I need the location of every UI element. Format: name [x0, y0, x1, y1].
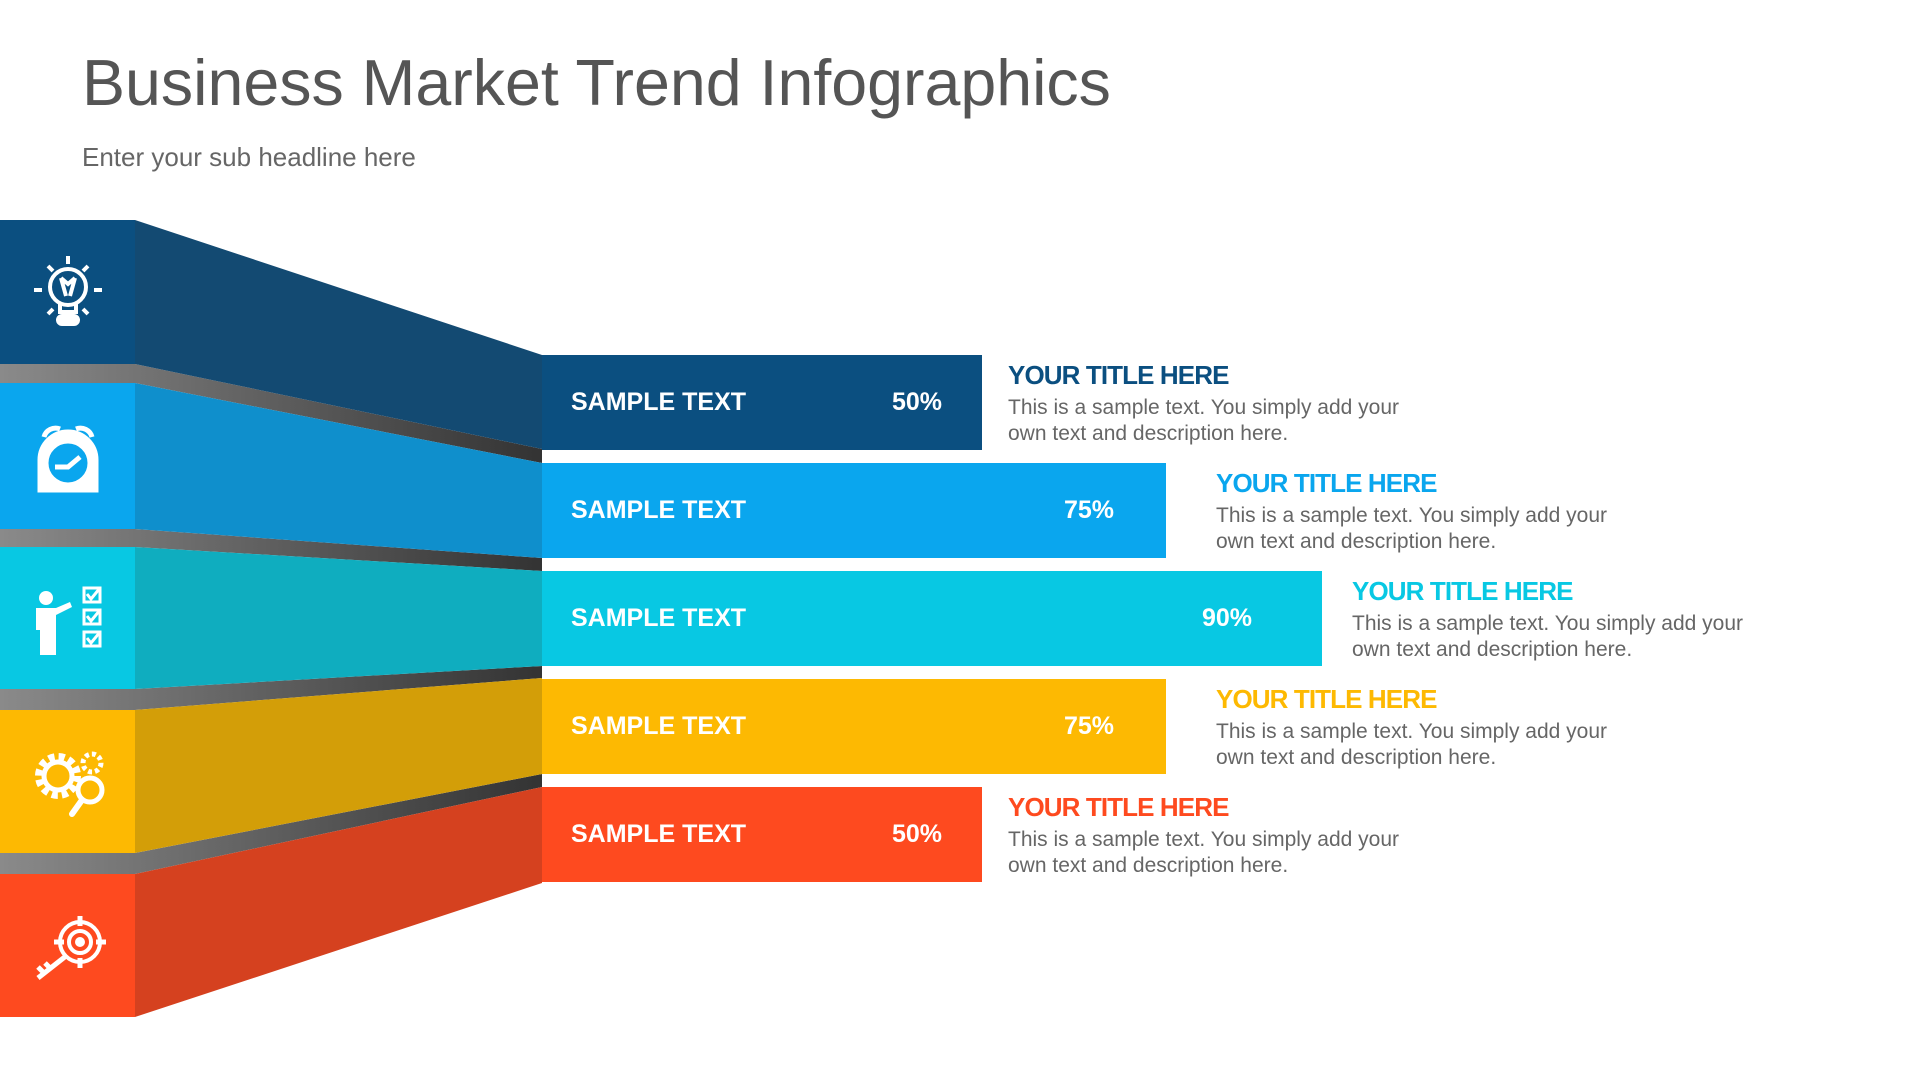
bar 2: SAMPLE TEXT [571, 496, 746, 524]
text block 3 [1352, 576, 1743, 661]
text block 5: This is a sample text. You simply add your [1008, 828, 1399, 851]
text block 3: This is a sample text. You simply add your [1352, 612, 1743, 635]
text block 3: YOUR TITLE HERE [1352, 576, 1573, 606]
subtitle: Enter your sub headline here [82, 142, 416, 172]
bar 3 [542, 571, 1322, 666]
bar 4: SAMPLE TEXT [571, 712, 746, 740]
bar 5: SAMPLE TEXT [571, 820, 746, 848]
title: Business Market Trend Infographics [82, 47, 1111, 119]
bar 2 [542, 463, 1166, 558]
text block 4 [1216, 684, 1607, 769]
panel 5 [0, 787, 542, 1017]
text block 5: YOUR TITLE HERE [1008, 792, 1229, 822]
text block 1: This is a sample text. You simply add your [1008, 396, 1399, 419]
icon: gears [39, 754, 102, 814]
text block 3: own text and description here. [1352, 638, 1632, 661]
bar 1 [542, 355, 982, 450]
bar 3: 90% [1202, 604, 1252, 632]
text block 4: own text and description here. [1216, 746, 1496, 769]
text block 1: YOUR TITLE HERE [1008, 360, 1229, 390]
bar 5: 50% [892, 820, 942, 848]
icon: clock [40, 428, 96, 490]
text block 2: YOUR TITLE HERE [1216, 468, 1437, 498]
separators [0, 364, 542, 874]
bar 3: SAMPLE TEXT [571, 604, 746, 632]
text block 4: YOUR TITLE HERE [1216, 684, 1437, 714]
text block 2 [1216, 468, 1607, 553]
text block 1: own text and description here. [1008, 422, 1288, 445]
panel 4 [0, 678, 542, 853]
bar 4: 75% [1064, 712, 1114, 740]
bar 2: 75% [1064, 496, 1114, 524]
bar 4 [542, 679, 1166, 774]
panel 3 [0, 547, 542, 689]
panel 2 [0, 383, 542, 558]
icon: person checklist [36, 588, 100, 655]
bar 1: 50% [892, 388, 942, 416]
text block 5: own text and description here. [1008, 854, 1288, 877]
text block 5 [1008, 792, 1399, 877]
bar 5 [542, 787, 982, 882]
icon: bulb [34, 256, 102, 324]
text block 2: This is a sample text. You simply add your [1216, 504, 1607, 527]
text block 2: own text and description here. [1216, 530, 1496, 553]
text block 4: This is a sample text. You simply add your [1216, 720, 1607, 743]
icon: key target [38, 916, 106, 978]
bar 1: SAMPLE TEXT [571, 388, 746, 416]
panel 1 [0, 220, 542, 449]
text block 1 [1008, 360, 1399, 445]
